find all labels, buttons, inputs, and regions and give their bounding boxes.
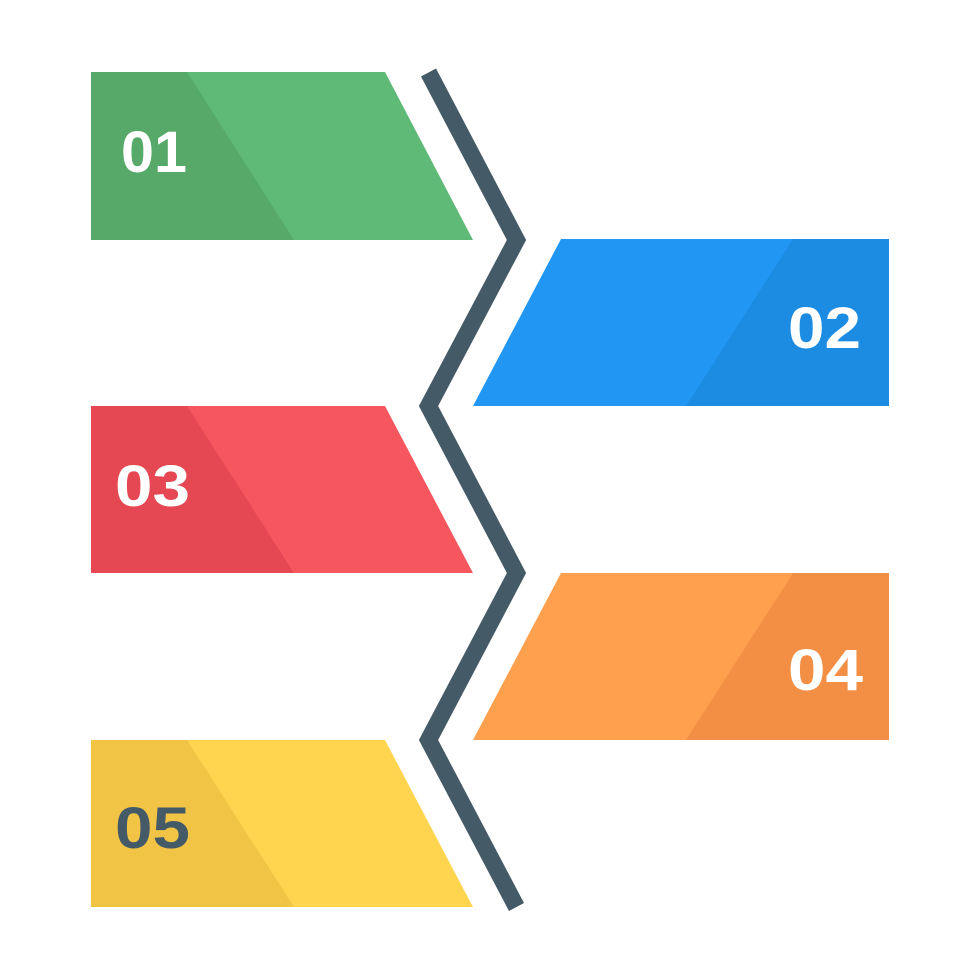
panel: step 01 — [91, 72, 473, 240]
panel: step 05: 05 — [115, 796, 190, 861]
panel: step 05 — [91, 740, 473, 907]
panel: step 02 — [473, 239, 889, 406]
panel: step 01: 01 — [121, 120, 187, 185]
panel: step 04: 04 — [788, 638, 863, 703]
panel: step 03: 03 — [115, 454, 190, 519]
zigzag connector line — [428, 72, 516, 907]
panel: step 04 — [473, 573, 889, 740]
panel: step 03 — [91, 406, 473, 573]
panel: step 02: 02 — [788, 296, 861, 361]
